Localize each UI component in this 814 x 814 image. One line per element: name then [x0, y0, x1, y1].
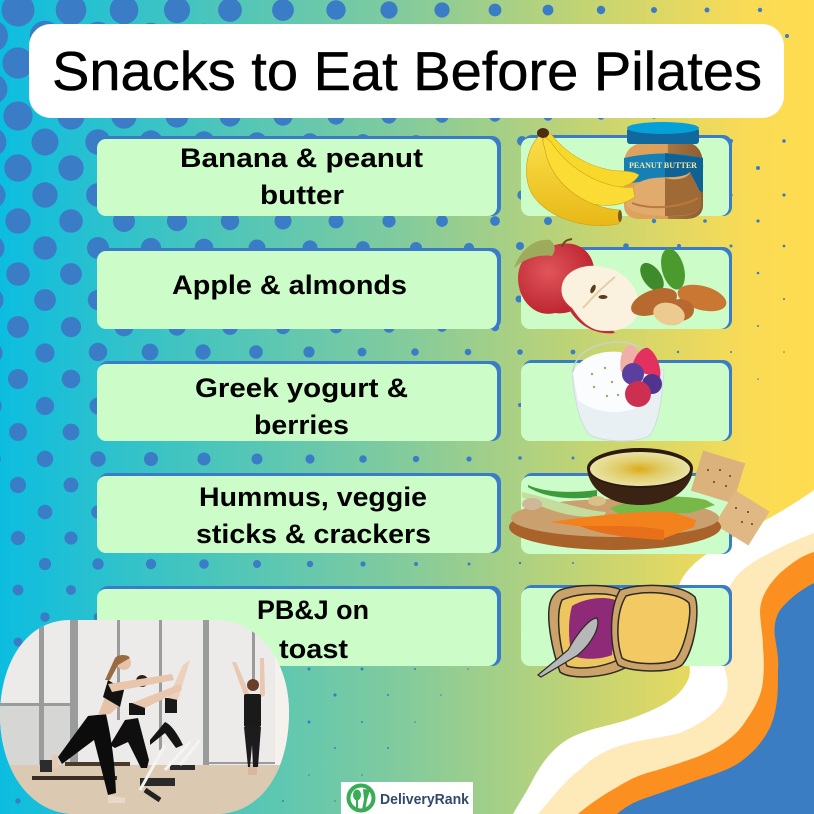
icon: PB&J toast slices and knife: [538, 585, 697, 677]
image panel: row 1: [521, 135, 732, 216]
image panel: row 2: [521, 247, 732, 329]
decorative waves bottom right: [513, 490, 814, 814]
image panel: row 4: [521, 473, 732, 554]
photo: pilates class: [0, 620, 289, 814]
panel: greek yogurt label: Greek yogurt &: [195, 373, 408, 403]
image panel: row 5: [521, 585, 732, 666]
title banner: Snacks to Eat Before Pilates: [52, 40, 762, 102]
logo: DeliveryRank: [341, 782, 473, 814]
floor: [0, 765, 289, 814]
icon: peanut butter jar: [624, 122, 703, 219]
icon: almonds and leaves: [627, 246, 729, 329]
panel: banana and peanut butter label: [97, 136, 501, 216]
reformer machines: [32, 740, 200, 800]
instructor: [232, 658, 265, 775]
title banner: [29, 24, 784, 118]
logo: DeliveryRank: DeliveryRank: [380, 791, 470, 808]
panel: greek yogurt label: [97, 361, 501, 441]
panel: hummus label: sticks & crackers: [196, 519, 431, 549]
woman 2: [110, 675, 182, 768]
panel: greek yogurt label: berries: [254, 410, 349, 440]
woman 1: [52, 655, 174, 803]
icon: crackers: [691, 450, 770, 546]
panel: apple and almonds label: Apple & almonds: [172, 270, 407, 300]
icon: cut apple: [561, 266, 639, 333]
panel: hummus label: [97, 473, 501, 553]
woman 3: [150, 660, 190, 748]
icon: bananas: [526, 128, 639, 226]
panel: PB&J label: [97, 586, 501, 666]
panel: hummus label: Hummus, veggie: [199, 482, 427, 512]
icon: whole apple: [514, 239, 594, 314]
panel: banana and peanut butter label: butter: [260, 180, 345, 210]
panel: PB&J label: toast: [279, 634, 348, 664]
panel: PB&J label: PB&J on: [257, 595, 369, 625]
icon: yogurt cup with berries: [572, 342, 664, 441]
icon: hummus board with veggies: [509, 448, 721, 550]
window frames: [0, 620, 275, 765]
image panel: row 3: [521, 360, 732, 441]
panel: banana and peanut butter label: Banana & peanut: [180, 143, 423, 173]
panel: apple and almonds label: [97, 248, 501, 329]
icon: peanut butter jar: PEANUT BUTTER: [629, 161, 697, 170]
